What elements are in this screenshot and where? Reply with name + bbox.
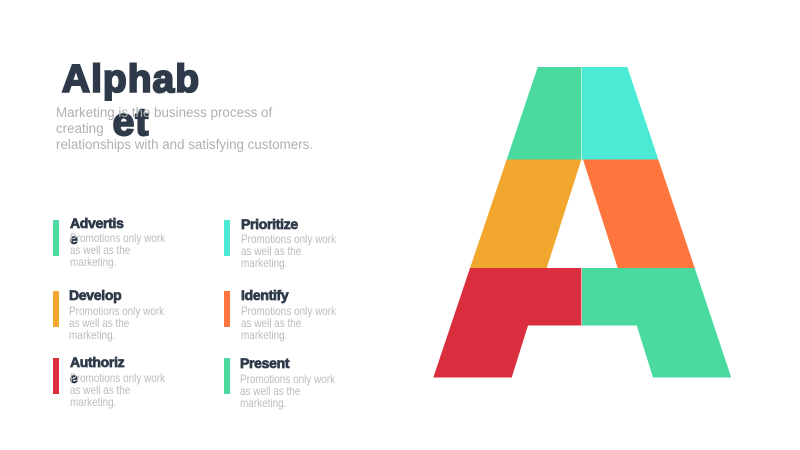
color bar xyxy=(224,290,230,327)
segment: bottom left xyxy=(433,268,581,378)
description: as well as the xyxy=(240,385,300,398)
description: Promotions only work xyxy=(240,373,335,386)
heading: Advertis xyxy=(70,215,124,231)
description xyxy=(241,233,336,270)
segment: middle right xyxy=(583,160,695,268)
intro text xyxy=(56,105,313,153)
description: as well as the xyxy=(241,245,301,258)
description xyxy=(70,232,165,269)
description xyxy=(69,305,164,342)
description: as well as the xyxy=(69,317,129,330)
item: Authorize xyxy=(53,354,165,409)
description: marketing. xyxy=(70,396,116,409)
title xyxy=(62,58,200,144)
intro text: relationships with and satisfying customers. xyxy=(56,137,313,153)
heading: Present xyxy=(240,355,289,371)
segment: middle left xyxy=(470,160,581,268)
heading xyxy=(70,354,124,386)
description: Promotions only work xyxy=(70,232,165,245)
item: Advertise xyxy=(53,215,165,269)
color bar xyxy=(224,358,230,394)
item: Develop xyxy=(53,287,164,342)
description: Promotions only work xyxy=(70,372,165,385)
description xyxy=(240,373,335,410)
intro text: creating xyxy=(56,121,104,137)
segment: top right xyxy=(582,67,658,160)
heading: Prioritize xyxy=(241,216,298,232)
description: Promotions only work xyxy=(241,233,336,246)
heading: e xyxy=(70,231,78,247)
heading: Develop xyxy=(69,287,121,303)
color bar xyxy=(224,220,230,256)
description xyxy=(70,372,165,409)
heading: e xyxy=(70,370,78,386)
color bar xyxy=(53,220,59,256)
description xyxy=(241,305,336,342)
heading: Authoriz xyxy=(70,354,124,370)
description: marketing. xyxy=(241,257,287,270)
item: Prioritize xyxy=(224,216,336,270)
intro text: Marketing is the business process of xyxy=(56,105,272,121)
color bar xyxy=(53,358,59,394)
item: Identify xyxy=(224,287,336,342)
description: as well as the xyxy=(241,317,301,330)
description: as well as the xyxy=(70,244,130,257)
description: Promotions only work xyxy=(241,305,336,318)
description: marketing. xyxy=(241,329,287,342)
description: marketing. xyxy=(70,256,116,269)
title: et xyxy=(113,101,149,144)
heading: Identify xyxy=(241,287,288,303)
title: Alphab xyxy=(62,58,200,101)
description: as well as the xyxy=(70,384,130,397)
segment: top left xyxy=(507,67,581,160)
description: marketing. xyxy=(69,329,115,342)
item: Present xyxy=(224,355,335,410)
segment: bottom right xyxy=(582,268,731,378)
description: marketing. xyxy=(240,397,286,410)
heading xyxy=(70,215,124,247)
description: Promotions only work xyxy=(69,305,164,318)
color bar xyxy=(53,290,59,327)
